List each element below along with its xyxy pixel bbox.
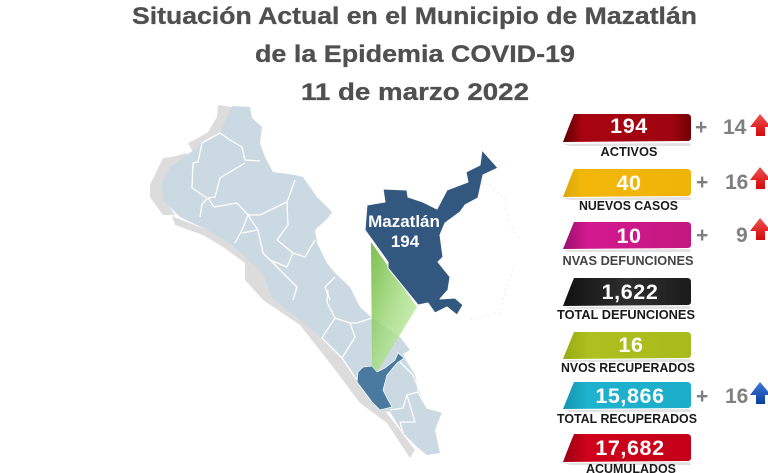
map label: 194 [391,232,420,251]
title: Situación Actual en el Municipio de Mazatlán [132,3,697,30]
map label [368,212,440,251]
stat: nuevas defunciones [562,218,768,268]
municipal borders [192,133,442,433]
stat: total defunciones [557,278,695,322]
stat: nuevas defunciones: + [696,224,708,247]
municipality of Mazatlán on the state map [357,353,404,410]
stat: nuevos casos: 16 [725,171,748,194]
icon: up arrow [750,218,768,240]
map: state of Sinaloa [150,105,442,458]
stat: activos: + [695,116,707,139]
green zoom wedge [371,242,417,372]
stat: nuevas defunciones: 10 [616,224,642,248]
stat: nuevas defunciones: 9 [736,224,748,247]
coastal strips [150,105,415,458]
stat: total defunciones: 1,622 [602,280,658,304]
stat: activos: ACTIVOS [600,144,658,159]
stat: total recuperados: TOTAL RECUPERADOS [557,411,697,426]
stat: nuevos recuperados: 16 [618,333,644,357]
stat: nuevos casos: 40 [616,171,642,195]
title: 11 de marzo 2022 [301,79,529,106]
stat: activos: 194 [610,114,648,138]
stat: total recuperados: 15,866 [595,384,665,408]
stat: acumulados: 17,682 [595,436,665,460]
stat: nuevos recuperados [561,332,695,375]
land [162,106,442,455]
stat: activos: 14 [723,116,747,139]
map label: Mazatlán [368,212,440,231]
icon: up arrow [750,382,768,404]
stat: nuevos casos: + [696,171,708,194]
stat: nuevas defunciones: NVAS DEFUNCIONES [562,253,694,268]
icon: up arrow [750,114,768,136]
stat: acumulados [563,434,691,473]
icon: up arrow [750,167,768,189]
title [132,3,697,106]
stat: total recuperados: 16 [725,385,748,408]
map: enlarged municipality of Mazatlán [365,150,520,320]
stat: total recuperados: + [696,385,708,408]
stat: nuevos recuperados: NVOS RECUPERADOS [561,360,695,375]
stat: total defunciones: TOTAL DEFUNCIONES [557,307,695,322]
stat: total recuperados [557,382,768,426]
stat: nuevos casos: NUEVOS CASOS [579,198,678,213]
stat: activos [563,114,768,159]
title: de la Epidemia COVID-19 [255,41,575,68]
stat: nuevos casos [563,167,768,213]
